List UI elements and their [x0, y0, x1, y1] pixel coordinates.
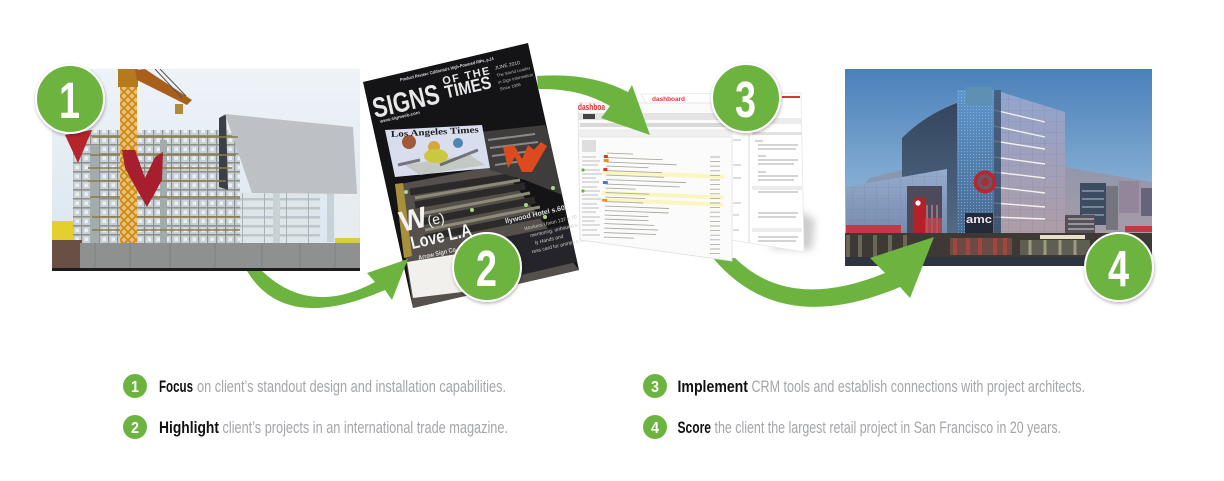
magazine cover story text: W(e): [396, 198, 447, 239]
magazine masthead: in Sign Information: [498, 72, 534, 85]
AMC sign: amc: [966, 214, 992, 226]
arrow from step 1 to step 2: [247, 259, 408, 308]
magazine masthead: SIGNS: [369, 78, 443, 124]
legend item 2: 2: [131, 420, 139, 437]
step 4 badge: 4: [1108, 240, 1129, 297]
legend item 4: Score: [678, 418, 711, 437]
target logo: [974, 170, 996, 194]
dashboard logo: dashboa: [578, 102, 606, 112]
arrow from step 2 to step 3: [537, 75, 650, 135]
legend item 1: Focus: [159, 377, 193, 396]
magazine masthead: [367, 48, 537, 125]
magazine masthead: Product Review: California's High-Powered RIPs, p.14: [400, 56, 495, 82]
photo 1: billboard under construction: [52, 69, 360, 271]
magazine masthead: TIMES: [443, 72, 493, 102]
CRM dashboard screenshots: [578, 93, 815, 261]
legend item 4: the client the largest retail project in San Francisco in 20 years.: [714, 418, 1061, 437]
magazine cover story text: ly Hands and: [534, 234, 564, 246]
legend item 3: CRM tools and establish connections with project architects.: [752, 377, 1085, 396]
legend item 3: 3: [651, 379, 659, 396]
magazine cover: Los Angeles Times: [391, 124, 480, 139]
magazine masthead: JUNE 2010: [494, 60, 521, 72]
legend item 4: 4: [651, 420, 659, 437]
step 3 badge: 3: [735, 71, 756, 128]
step 4 badge: [1085, 233, 1153, 301]
legend item 1: on client’s standout design and installation capabilities.: [197, 377, 506, 396]
magazine cover: [363, 43, 589, 308]
legend item 1: [123, 374, 506, 398]
legend item 2: client’s projects in an international trade magazine.: [222, 418, 508, 437]
legend item 1: 1: [131, 379, 139, 396]
CRM dashboard screenshots: dashboard: [652, 96, 685, 103]
legend item 4: [643, 415, 1061, 439]
step 2 badge: 2: [476, 240, 497, 297]
magazine masthead: www.signweb.com: [378, 110, 420, 124]
photo 4: finished retail complex: [845, 69, 1152, 266]
legend item 2: Highlight: [159, 418, 219, 437]
legend item 2: [123, 415, 508, 439]
step 1 badge: [36, 65, 104, 133]
magazine cover story text: Workers Union 137 s.70: [524, 214, 578, 232]
arrow from step 3 to step 4: [713, 237, 934, 307]
legend item 3: Implement: [678, 377, 748, 396]
legend item 3: [643, 374, 1085, 398]
magazine masthead: The World Leader: [496, 65, 531, 78]
magazine cover story text: mentoring, unbound s.78: [530, 221, 585, 239]
magazine cover story text: ress card for antrips s.88: [531, 237, 586, 255]
magazine cover story text: Arrow Sign Co.: [418, 246, 458, 262]
magazine masthead: Since 1906: [499, 82, 522, 92]
magazine masthead: OF THE: [441, 65, 491, 88]
magazine cover story text: Love L.A: [409, 220, 473, 253]
magazine cover story text: llywood Hotel s.60: [505, 205, 566, 225]
magazine cover story text: [396, 167, 589, 283]
step 3 badge: [712, 64, 780, 132]
step 1 badge: 1: [59, 72, 80, 129]
step 2 badge: [453, 233, 521, 301]
